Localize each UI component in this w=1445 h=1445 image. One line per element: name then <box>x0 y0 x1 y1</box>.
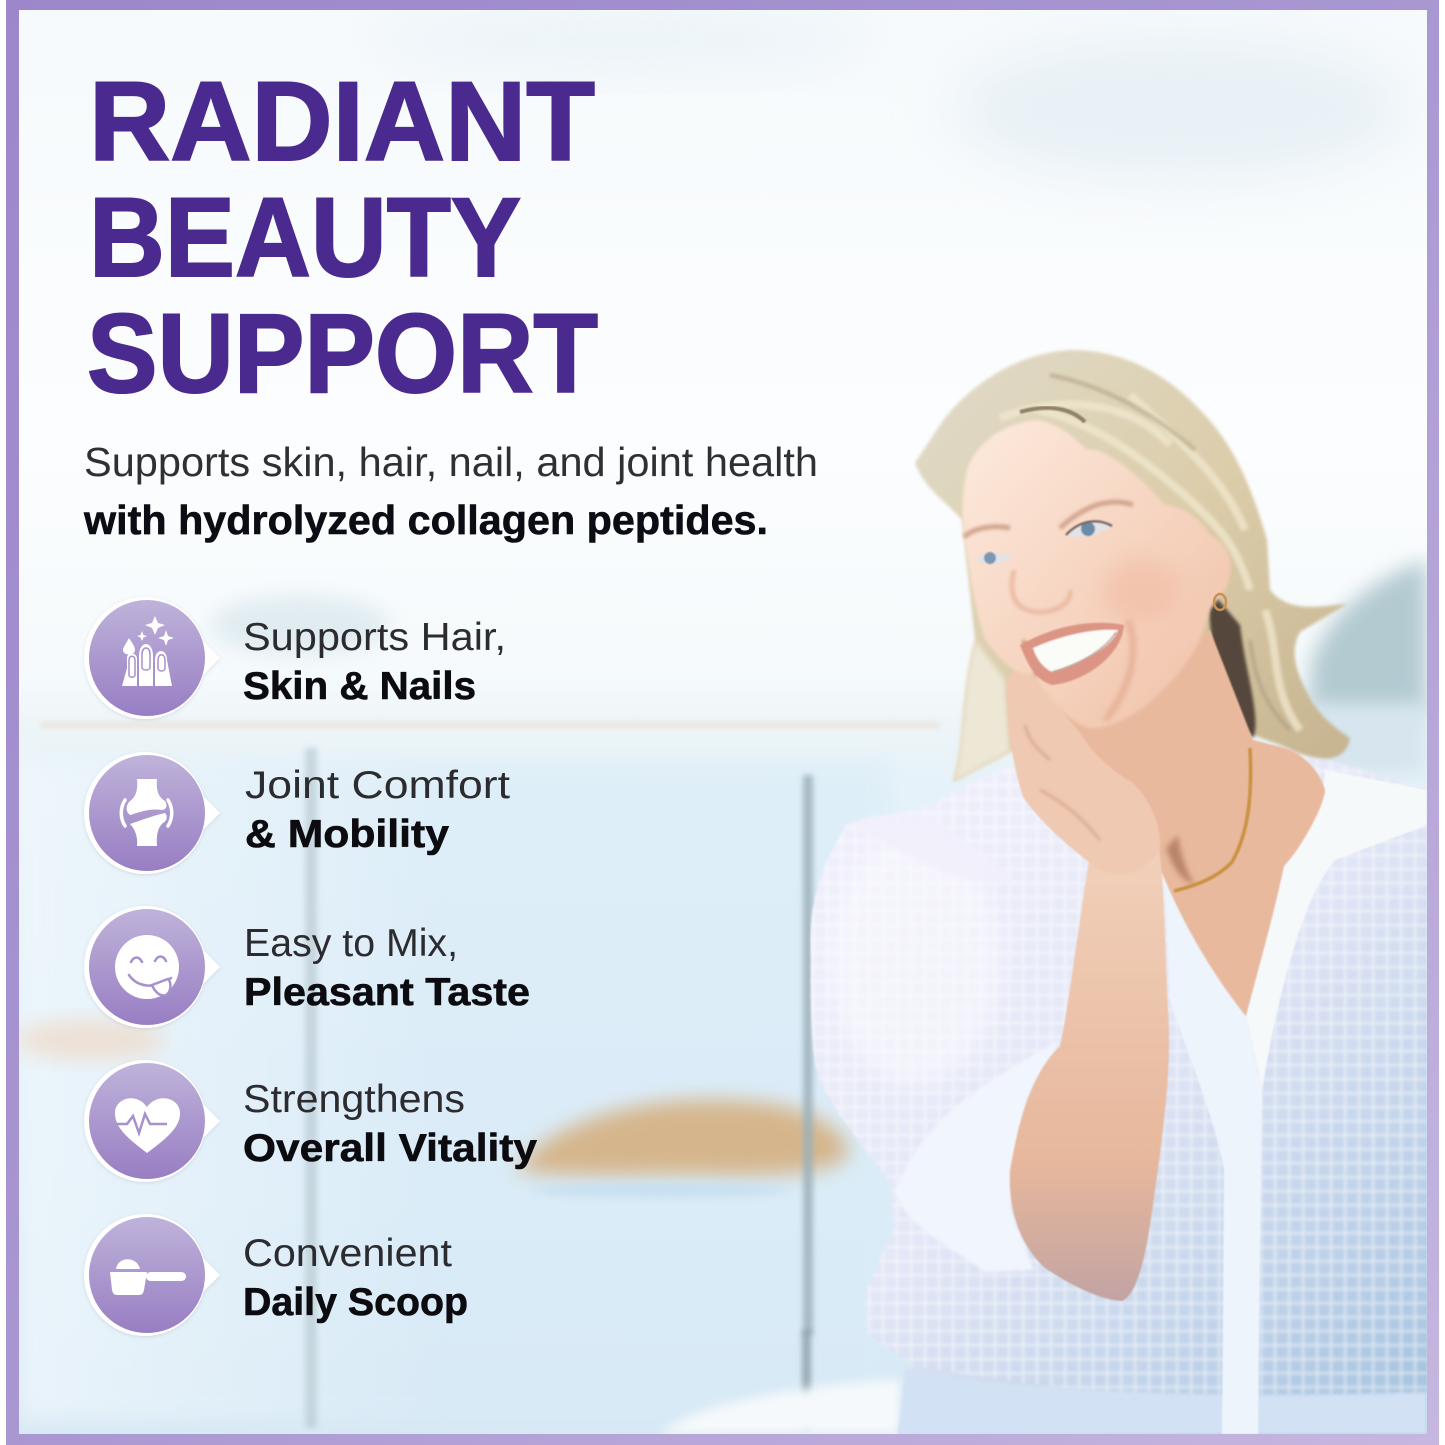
subtitle: Supports skin, hair, nail, and joint health <box>84 439 818 485</box>
benefit: hair, skin and nails <box>84 597 506 719</box>
badge <box>84 597 220 719</box>
label: & Mobility <box>245 813 449 856</box>
blouse <box>810 745 1427 1434</box>
icon: nails with sparkles <box>122 616 174 686</box>
label <box>243 616 506 708</box>
face <box>963 420 1230 728</box>
woman photo illustration <box>810 350 1427 1434</box>
title: BEAUTY <box>89 175 521 300</box>
label: Easy to Mix, <box>244 922 458 965</box>
disc <box>89 1217 205 1333</box>
label: Overall Vitality <box>243 1127 537 1170</box>
neck shadow <box>1166 835 1195 885</box>
badge <box>84 906 220 1028</box>
label <box>243 1078 537 1170</box>
label: Pleasant Taste <box>244 971 530 1014</box>
benefit: overall vitality <box>84 1060 537 1182</box>
forearm <box>1010 848 1169 1301</box>
badge <box>84 1214 220 1336</box>
label <box>245 764 510 856</box>
label: Skin & Nails <box>243 665 476 708</box>
badge <box>84 1060 220 1182</box>
subtitle: with hydrolyzed collagen peptides. <box>83 497 768 543</box>
hair strand highlights <box>1000 395 1300 730</box>
disc <box>89 755 205 871</box>
benefit: daily scoop <box>84 1214 468 1336</box>
eyebrows <box>964 502 1133 537</box>
eyes <box>976 521 1112 564</box>
disc <box>89 1063 205 1179</box>
label: Supports Hair, <box>243 616 506 659</box>
disc <box>89 909 205 1025</box>
neck and chest <box>1050 630 1325 1016</box>
icon: heart with pulse <box>115 1098 180 1153</box>
finger lines <box>1025 725 1100 840</box>
hair back <box>915 350 1350 782</box>
hair shadow <box>1209 590 1256 738</box>
hair: pale wisps at lower left <box>953 640 1010 782</box>
label <box>243 1232 468 1324</box>
badge <box>84 752 220 874</box>
label: Strengthens <box>243 1078 465 1121</box>
nose shadow <box>1012 570 1070 612</box>
necklace <box>1174 748 1251 891</box>
icon: knee joint <box>121 779 172 846</box>
label: Convenient <box>243 1232 452 1275</box>
benefit: joint comfort <box>84 752 510 874</box>
title <box>87 59 598 416</box>
icon: measuring scoop <box>110 1259 186 1295</box>
icon: smiling face with tongue <box>115 935 179 999</box>
label <box>244 922 530 1014</box>
title: RADIANT <box>89 59 595 184</box>
title: SUPPORT <box>87 291 598 416</box>
label: Joint Comfort <box>245 764 510 807</box>
label: Daily Scoop <box>243 1281 468 1324</box>
benefit: pleasant taste <box>84 906 530 1028</box>
disc <box>89 600 205 716</box>
smile <box>1020 623 1124 685</box>
earring <box>1214 594 1226 610</box>
hand <box>1006 667 1160 874</box>
subtitle <box>83 439 818 543</box>
cheek blush and fold <box>1023 558 1178 720</box>
